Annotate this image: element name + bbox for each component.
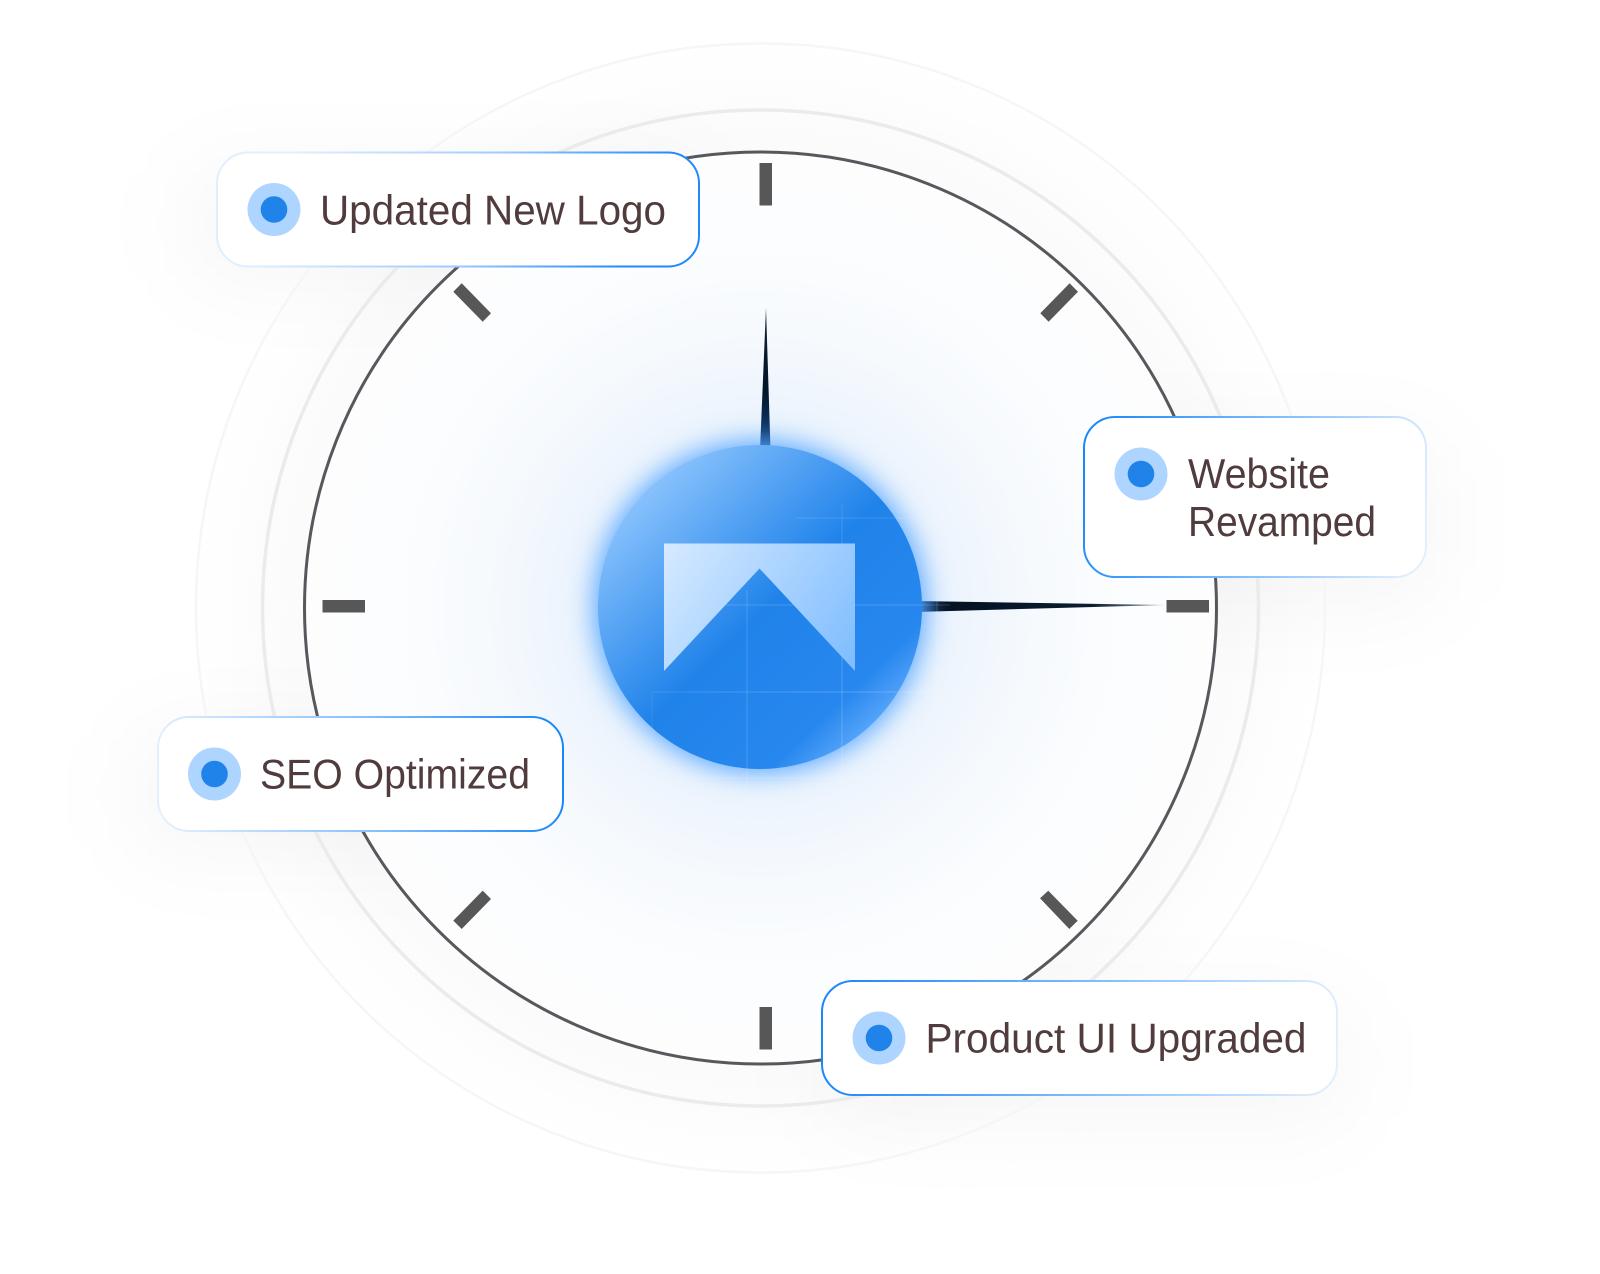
central disc — [598, 445, 922, 769]
label: Updated New Logo — [320, 186, 666, 234]
card frame — [158, 717, 563, 831]
label: SEO Optimized — [260, 750, 530, 798]
label second line: Revamped — [1188, 498, 1376, 545]
logo mark — [664, 544, 855, 671]
faint grid — [652, 505, 950, 779]
icon: bullet dot — [1114, 448, 1168, 500]
hour ticks — [322, 163, 1209, 1050]
icon: bullet dot — [852, 1012, 906, 1064]
card: Product UI Upgraded — [822, 981, 1337, 1095]
card frame — [217, 152, 699, 266]
card shadows — [135, 170, 1435, 1120]
icon: bullet dot — [188, 748, 241, 800]
minute hand — [760, 308, 770, 450]
label: Product UI Upgraded — [926, 1014, 1306, 1062]
card: SEO Optimized — [158, 717, 563, 831]
card: Website Revamped — [1084, 417, 1426, 577]
middle ring — [262, 110, 1258, 1106]
clock infographic — [157, 42, 1427, 1174]
disc glow — [594, 441, 926, 773]
label: Website — [1188, 450, 1330, 497]
clock face — [304, 152, 1216, 1064]
card: Updated New Logo — [217, 152, 699, 266]
hour hand — [915, 601, 1165, 612]
icon: bullet dot — [248, 183, 300, 236]
soft background shadow — [240, 88, 1280, 1128]
card frame — [822, 981, 1337, 1095]
card frame — [1084, 417, 1426, 577]
main ring — [304, 152, 1216, 1064]
outer ring — [196, 44, 1325, 1172]
